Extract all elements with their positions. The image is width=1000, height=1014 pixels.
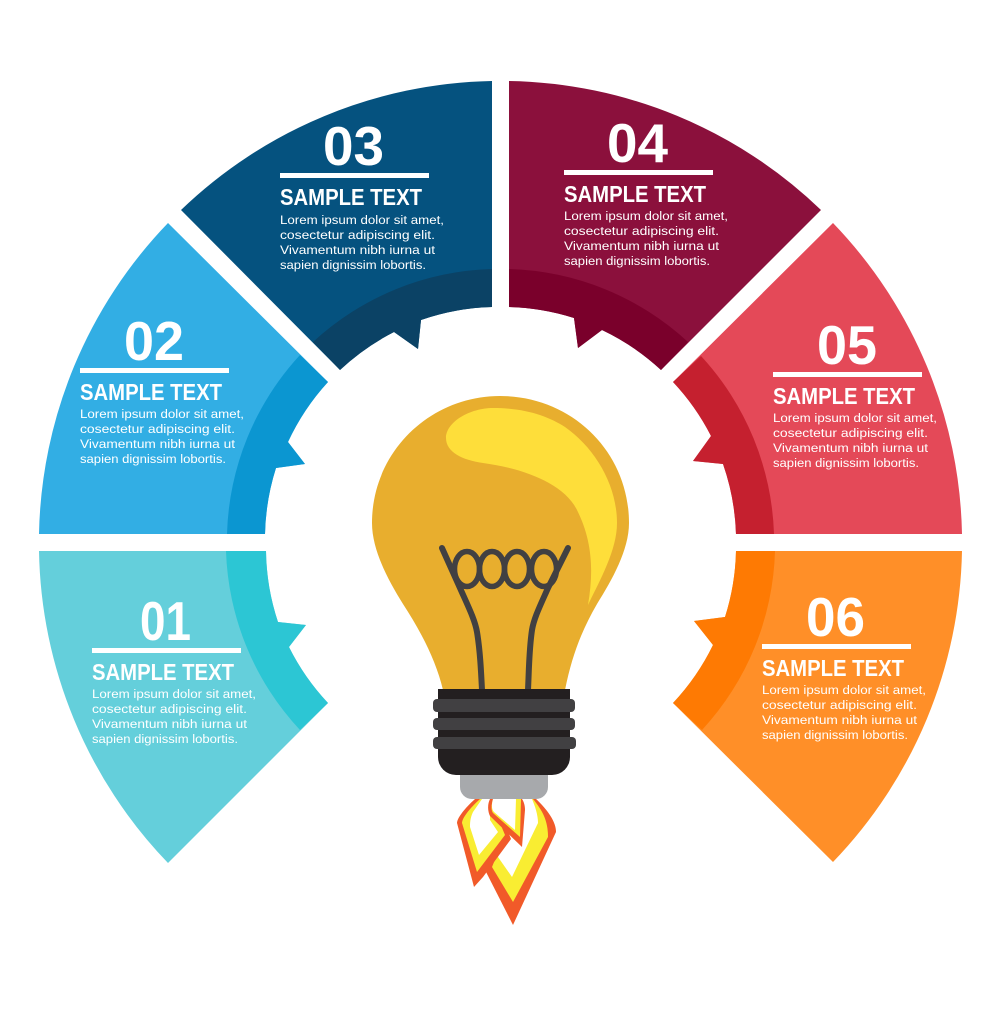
panel: segment 04: sapien dignissim lobortis. [564,254,710,268]
panel: segment 02: cosectetur adipiscing elit. [80,422,235,436]
icon: light bulb [372,396,629,799]
panel: segment 02: 02 [124,310,184,372]
panel: segment 06: Lorem ipsum dolor sit amet, [762,683,926,697]
panel: segment 05: 05 [817,314,877,376]
panel: segment 05: Lorem ipsum dolor sit amet, [773,411,937,425]
panel: segment 06: cosectetur adipiscing elit. [762,698,917,712]
filament [442,548,568,690]
panel: segment 01 [39,551,328,863]
panel: segment 01: 01 [140,590,191,652]
screw base [438,689,570,775]
panel: segment 02: sapien dignissim lobortis. [80,452,226,466]
bulb highlight [446,408,617,605]
panel: segment 05: Vivamentum nibh iurna ut [773,441,929,455]
panel: segment 05: sapien dignissim lobortis. [773,456,919,470]
panel: segment 01: Vivamentum nibh iurna ut [92,717,248,731]
panel: segment 04: cosectetur adipiscing elit. [564,224,719,238]
panel: segment 06: SAMPLE TEXT [762,655,905,681]
panel: segment 02: Lorem ipsum dolor sit amet, [80,407,244,421]
panel: segment 04 [509,81,821,370]
panel: segment 06: sapien dignissim lobortis. [762,728,908,742]
panel: segment 06 [673,551,962,862]
icon: rocket flames [457,798,556,925]
panel: segment 02: SAMPLE TEXT [80,379,223,405]
panel: segment 01: Lorem ipsum dolor sit amet, [92,687,256,701]
panel: segment 01: cosectetur adipiscing elit. [92,702,247,716]
panel: segment 06: Vivamentum nibh iurna ut [762,713,918,727]
panel: segment 03: Lorem ipsum dolor sit amet, [280,213,444,227]
neck [460,770,548,799]
panel: segment 01: sapien dignissim lobortis. [92,732,238,746]
panel: segment 02: Vivamentum nibh iurna ut [80,437,236,451]
panel: segment 04: SAMPLE TEXT [564,181,707,207]
panel: segment 05: cosectetur adipiscing elit. [773,426,928,440]
panel: segment 05 [673,223,962,534]
panel: segment 01: SAMPLE TEXT [92,659,235,685]
panel: segment 04: Vivamentum nibh iurna ut [564,239,720,253]
panel: segment 05: SAMPLE TEXT [773,383,916,409]
bulb glass [372,396,629,690]
panel: segment 03: SAMPLE TEXT [280,184,423,210]
panel: segment 02 [39,223,328,534]
panel: segment 03: cosectetur adipiscing elit. [280,228,435,242]
panel: segment 03: sapien dignissim lobortis. [280,258,426,272]
panel: segment 06: 06 [806,586,865,648]
panel: segment 04: Lorem ipsum dolor sit amet, [564,209,728,223]
panel: segment 03: 03 [323,115,384,177]
panel: segment 04: 04 [607,112,668,174]
panel: segment 03: Vivamentum nibh iurna ut [280,243,436,257]
panel: segment 03 [181,81,492,370]
